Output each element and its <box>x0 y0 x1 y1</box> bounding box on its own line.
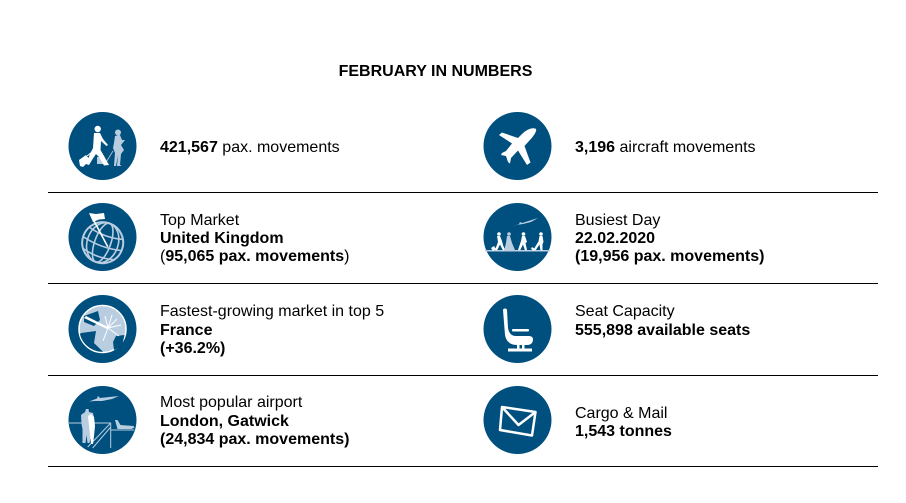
panel: passenger movements <box>68 112 340 180</box>
icon: earth map <box>68 295 136 363</box>
panel: cargo and mail <box>484 386 672 454</box>
panel: busiest day <box>484 203 764 271</box>
panel: most popular airport <box>68 386 349 454</box>
icon: seat <box>484 295 552 363</box>
panel: fastest-growing market: (+36.2%) <box>160 340 225 357</box>
stat text: Cargo & Mail <box>575 405 667 422</box>
panel: most popular airport: (24,834 pax. movements) <box>160 431 349 448</box>
icon: envelope <box>484 386 552 454</box>
stat text: Fastest-growing market in top 5 <box>160 303 384 320</box>
panel: seat capacity <box>484 295 750 363</box>
stat text: 421,567 pax. movements <box>160 139 340 156</box>
stat text: Busiest Day <box>575 212 660 229</box>
icon: travellers and plane <box>484 203 552 271</box>
panel: most popular airport: London, Gatwick <box>160 413 289 430</box>
icon: globe with flag <box>68 203 136 271</box>
stat text: Top Market <box>160 212 240 229</box>
panel: aircraft movements <box>484 112 756 180</box>
panel: fastest-growing market <box>68 295 384 363</box>
icon: airport viewing deck <box>68 386 136 454</box>
panel: top market: (95,065 pax. movements) <box>160 248 349 265</box>
panel: top market <box>68 203 349 271</box>
stat text: Seat Capacity <box>575 303 675 320</box>
panel: top market: United Kingdom <box>160 230 284 247</box>
stat text: Most popular airport <box>160 394 303 411</box>
title: FEBRUARY IN NUMBERS <box>339 63 533 80</box>
panel: fastest-growing market: France <box>160 322 213 339</box>
panel: cargo and mail: 1,543 tonnes <box>575 423 672 440</box>
panel: seat capacity: 555,898 available seats <box>575 322 750 339</box>
stat text: 3,196 aircraft movements <box>575 139 756 156</box>
icon: airplane <box>484 112 552 180</box>
panel: busiest day: 22.02.2020 <box>575 230 655 247</box>
panel: busiest day: (19,956 pax. movements) <box>575 248 764 265</box>
icon: passengers <box>68 112 136 180</box>
